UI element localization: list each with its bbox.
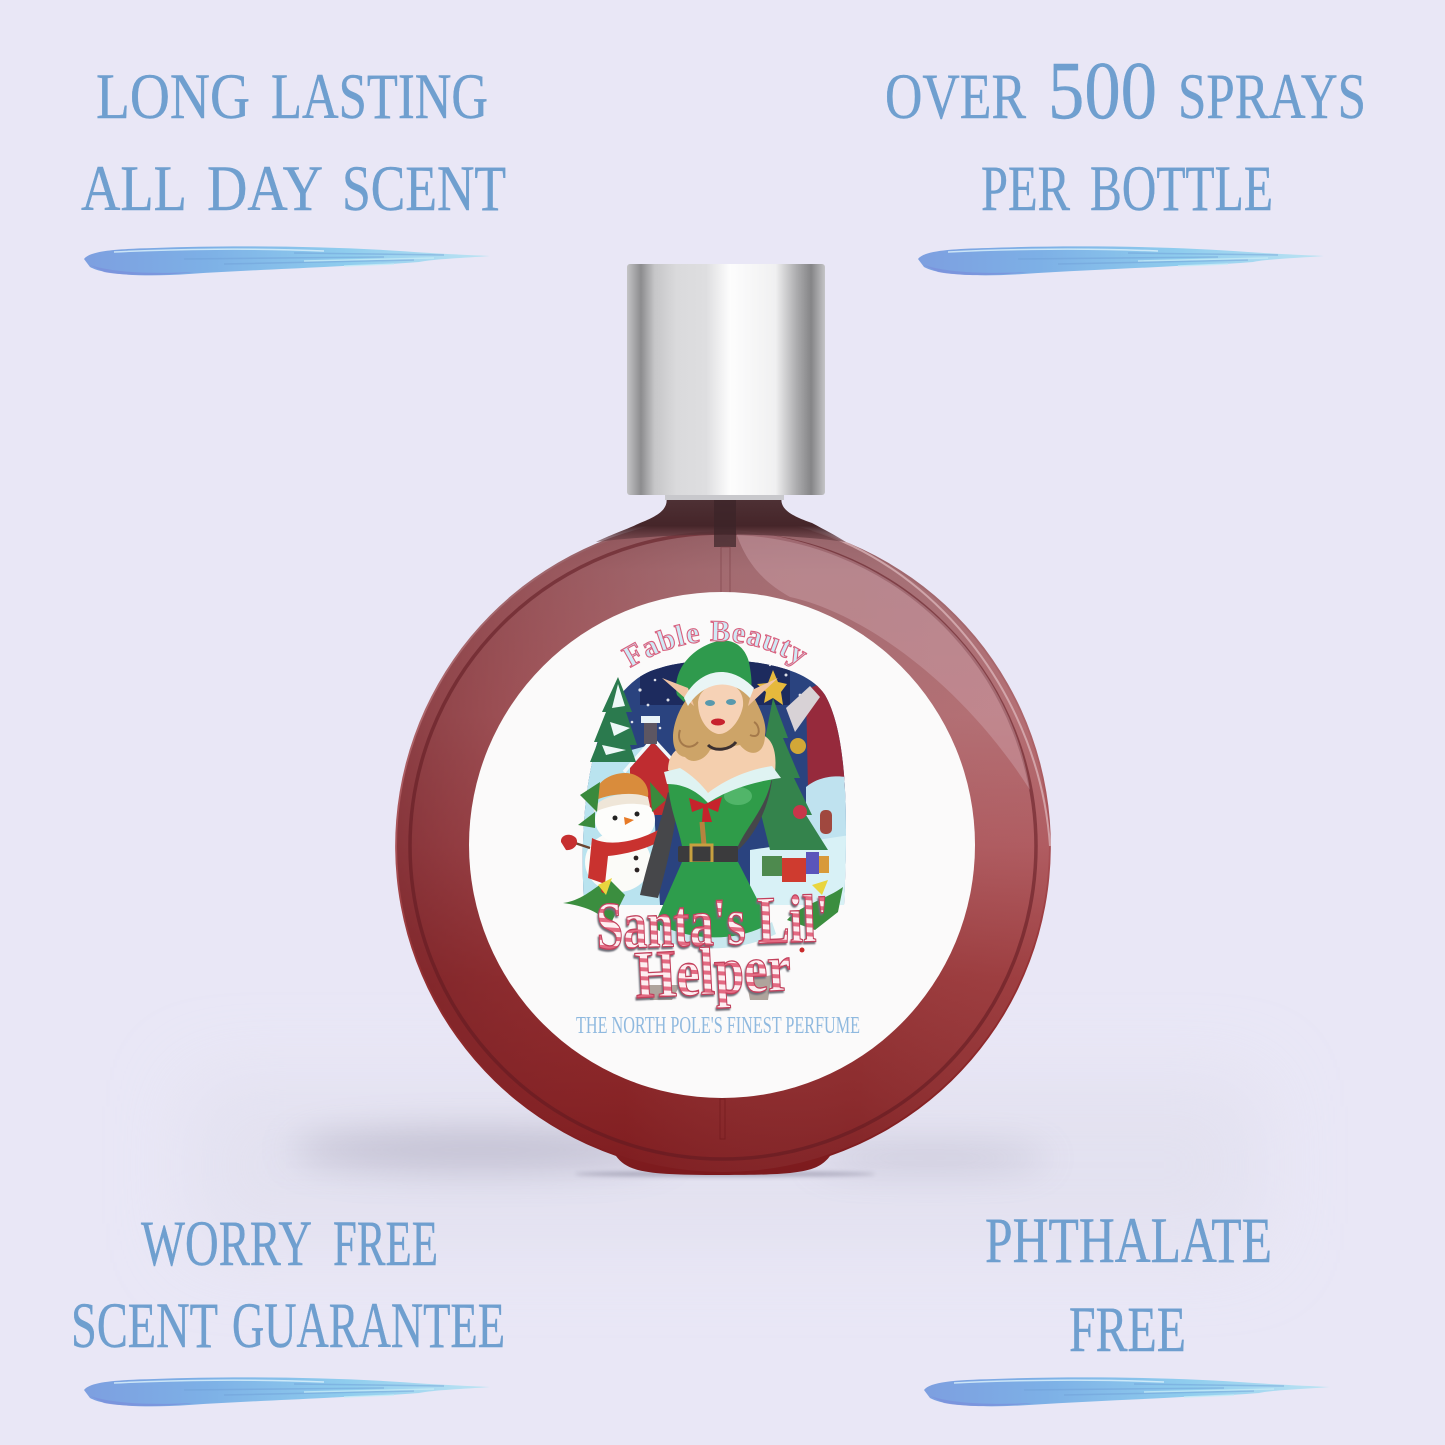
elf ears (662, 678, 778, 706)
side shading (397, 520, 1049, 1172)
heading line: over 500 sprays: 500 (1048, 44, 1157, 136)
legs (645, 975, 772, 1000)
feature: long lasting all day scent (81, 61, 506, 275)
heading line: per bottle: PER (981, 153, 1070, 225)
heading line: long lasting: LASTING (271, 61, 488, 133)
elf hair (673, 680, 765, 761)
tree bauble (790, 738, 806, 754)
heading line: free: FREE (1069, 1294, 1186, 1366)
glass inner rim line (410, 533, 1036, 1159)
product name: Helper (633, 929, 793, 1013)
outer pink rim highlight (812, 530, 1050, 846)
red barn (630, 742, 672, 815)
floor shadow (190, 1080, 1260, 1250)
heading line: per bottle: BOTTLE (1090, 153, 1273, 225)
snowman (561, 773, 666, 892)
heading line: worry free: WORRY (141, 1208, 312, 1280)
bottle neck (596, 496, 846, 542)
glass reflection (735, 530, 1030, 790)
brand arc text: Fable Beauty (620, 620, 808, 668)
bust highlight (724, 787, 752, 805)
heading line: all day scent: DAY (207, 153, 323, 225)
silver cap (627, 264, 825, 495)
choker (708, 742, 736, 749)
brush stroke underline (84, 246, 490, 275)
christmas tree right (755, 698, 828, 850)
heading line: long lasting (96, 61, 488, 133)
heading line: phthalate: PHTHALATE (985, 1205, 1272, 1277)
gift boxes (762, 852, 829, 882)
snowman face (612, 812, 640, 825)
glass body (395, 518, 1051, 1175)
white label (469, 592, 975, 1098)
snowman buttons (634, 856, 639, 872)
feature: over 500 sprays per bottle (885, 44, 1366, 275)
product name (595, 880, 830, 1013)
pine tree left (590, 677, 637, 762)
elf hat (676, 641, 752, 702)
heading line: scent guarantee: SCENT (71, 1290, 218, 1362)
product name: Santa's Lil' (595, 880, 830, 964)
holly (578, 782, 666, 828)
snowman arm and mitten (572, 842, 590, 848)
heading line: all day scent (81, 153, 506, 225)
night scene backdrop (582, 662, 846, 905)
heading line: all day scent: ALL (81, 153, 187, 225)
holly border (563, 878, 843, 952)
brush stroke underline (918, 246, 1324, 275)
cap collar (665, 495, 784, 500)
belt and buckle (678, 845, 738, 863)
heading line: long lasting: LONG (96, 61, 250, 133)
feature: phthalate free (924, 1205, 1330, 1406)
red bauble (793, 805, 807, 819)
lower tube (720, 1099, 725, 1139)
heading line: worry free: FREE (333, 1208, 438, 1280)
heading line: over 500 sprays: SPRAYS (1178, 61, 1366, 133)
dress fur neckline (664, 766, 781, 803)
snow ground (575, 745, 660, 905)
elf green dress bodice (668, 776, 772, 846)
hat fur trim (684, 672, 754, 706)
brush stroke underline (84, 1377, 490, 1406)
hair curls (679, 722, 759, 747)
elf shoulders and chest (668, 734, 776, 802)
tagline: THE NORTH POLE'S FINEST PERFUME (576, 1013, 860, 1039)
black gloves (640, 780, 772, 898)
feature: worry free scent guarantee (71, 1208, 505, 1406)
red bow (689, 797, 722, 822)
dress skirt (653, 862, 772, 941)
snow specks (630, 664, 802, 730)
brick house right (806, 685, 845, 789)
skirt fur hem (660, 922, 776, 948)
perfume bottle (395, 264, 1051, 1175)
elf eyes and lips (705, 699, 736, 726)
heading line: scent guarantee: GUARANTEE (232, 1290, 505, 1362)
label illustration (560, 620, 846, 1013)
pump tube (714, 497, 736, 593)
snowman head (595, 796, 655, 844)
tree star (757, 670, 787, 705)
snowman body (585, 832, 651, 892)
brush stroke underline (924, 1377, 1330, 1406)
heading line: all day scent: SCENT (342, 153, 506, 225)
snowman scarf (588, 830, 658, 884)
heading line: over 500 sprays (885, 44, 1366, 136)
elf face (698, 684, 743, 734)
snowman hat (595, 773, 648, 800)
heading line: over 500 sprays: OVER (885, 61, 1027, 133)
heading line: scent guarantee (71, 1290, 505, 1362)
corset lace (702, 822, 704, 845)
heading line: per bottle (981, 153, 1273, 225)
